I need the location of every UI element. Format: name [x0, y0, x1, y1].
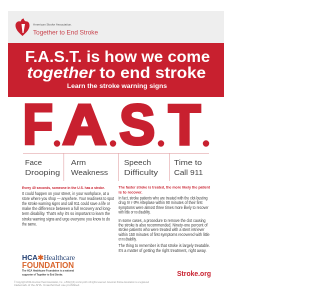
website link: Stroke.org [177, 269, 211, 278]
title line 2: together to end stroke [27, 65, 206, 82]
title line 1: F.A.S.T. is how we come [25, 49, 210, 66]
right paragraph 1: symptoms were almost three times more likely to recover [118, 205, 209, 210]
right paragraph 1: with little or no disability. [118, 210, 151, 214]
sponsor note: supporter of Together to End Stroke. [22, 272, 63, 276]
left paragraph: store where you shop — anywhere. Your readiness to spot [22, 196, 115, 201]
column: face drooping: Face [25, 158, 42, 167]
right paragraph 1: In fact, stroke patients who are treated with the clot-busting [118, 196, 208, 200]
left heading: Every 40 seconds, someone in the U.S. has a stroke. [22, 185, 105, 190]
big F.A.S.T. heading [23, 93, 208, 156]
foundation wordmark: FOUNDATION [22, 261, 74, 270]
icon: heart and torch logo [16, 18, 30, 36]
tagline: Together to End Stroke [33, 30, 99, 36]
left paragraph: the same. [22, 221, 37, 226]
column: face drooping: Drooping [25, 168, 60, 177]
right paragraph 2: the stroke is also recommended. Ninety-one percent of [118, 223, 208, 228]
organisation name: American Stroke Association. [33, 22, 72, 26]
big F.A.S.T. heading: F [23, 93, 53, 156]
header band [8, 11, 224, 43]
right paragraph 3: It's a matter of getting the right treatment, right away. [118, 248, 207, 253]
right text block [118, 185, 211, 253]
F.A.S.T. meaning columns [23, 153, 209, 181]
column: time to call 911: Time to [174, 158, 202, 167]
left paragraph: the stroke warning signs and call 911 could save a life or [22, 201, 111, 206]
right paragraph 2: stroke patients who were treated with a stent retriever [118, 227, 205, 232]
big F.A.S.T. heading: A [62, 93, 106, 156]
copyright: © Copyright 2019 American Heart Association, Inc., a 501(c)(3) not-for-profit. All rights reserved. American Stroke Association is a registered [14, 281, 150, 284]
sponsor logo: HCA Healthcare Foundation [22, 254, 75, 276]
right paragraph 2: In some cases, a procedure to remove the clot causing [118, 218, 206, 223]
column: arm weakness: Weakness [71, 168, 108, 177]
left paragraph: stroke warning signs and urge everyone you know to do [22, 216, 111, 221]
right paragraph 2: or no disability. [118, 236, 137, 241]
big F.A.S.T. heading: T [168, 93, 200, 156]
left text block [22, 185, 115, 226]
column: speech difficulty: Speech [124, 158, 151, 167]
copyright: trademark of the AHA. Unauthorized use prohibited. [14, 284, 80, 287]
subtitle: Learn the stroke warning signs [67, 83, 167, 90]
right paragraph 3: The thing to remember is that stroke is largely treatable. [118, 243, 210, 248]
column: arm weakness: Arm [71, 158, 86, 167]
big F.A.S.T. heading: S [119, 93, 155, 156]
sponsor note: The HCA Healthcare Foundation is a national [22, 269, 74, 273]
left paragraph: term disability. That's why it's so important to learn the [22, 211, 111, 216]
right paragraph 1: drug IV r-tPA Alteplase within 90 minutes of their first [118, 200, 203, 205]
HCA Healthcare wordmark: HCA✱Healthcare [22, 254, 75, 262]
left paragraph: It could happen on your street, in your workplace, at a [22, 191, 110, 196]
right heading: is to recover. [118, 190, 142, 195]
column: speech difficulty: Difficulty [124, 168, 158, 177]
right heading: The faster stroke is treated, the more likely the patient [118, 185, 211, 190]
column: time to call 911: Call 911 [174, 168, 203, 177]
left paragraph: make the difference between a full recovery and long- [22, 206, 112, 211]
right paragraph 2: within 150 minutes of first symptoms recovered with little [118, 232, 210, 237]
red title banner [8, 43, 224, 97]
